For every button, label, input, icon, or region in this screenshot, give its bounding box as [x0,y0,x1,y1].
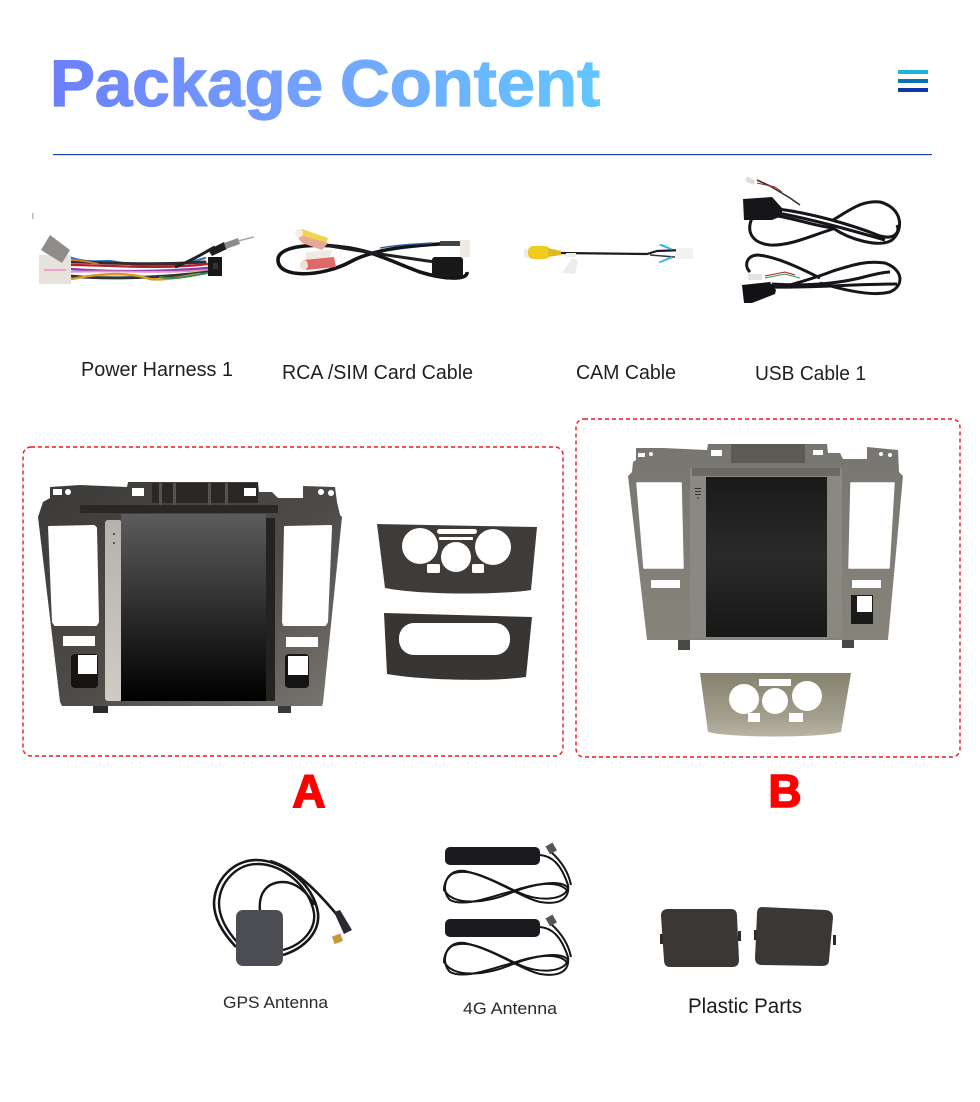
icon: menu [898,70,928,92]
antenna lower [444,915,571,975]
letter A: A [292,765,326,817]
label: USB cable: USB Cable 1 [755,363,866,385]
label: plastic parts: Plastic Parts [688,995,802,1018]
item: USB cable lower [742,255,900,303]
item: GPS antenna [214,860,352,966]
label: power harness: Power Harness 1 [81,359,233,381]
letter B: B [768,765,802,817]
trim panel A2 [384,613,532,680]
trim panel B [700,673,851,736]
title: Content [340,46,600,120]
item: RCA and SIM cable [278,229,470,278]
radio frame B [628,444,903,650]
panel: option B [576,419,960,757]
trim panel A1 [377,524,537,594]
item: power harness [32,213,254,284]
label: camera cable: CAM Cable [576,362,676,384]
item: plastic parts [660,907,836,967]
label: 4G antenna: 4G Antenna [463,999,558,1018]
item: 4G antenna [444,843,571,975]
panel: option A [23,447,563,756]
title: Package [50,46,323,120]
radio frame A [38,482,342,713]
antenna upper [444,843,571,903]
label: GPS antenna: GPS Antenna [223,993,329,1012]
title [50,46,600,120]
label: RCA and SIM cable: RCA /SIM Card Cable [282,362,473,384]
item: camera cable [524,244,693,274]
item: USB cable upper [743,176,900,245]
